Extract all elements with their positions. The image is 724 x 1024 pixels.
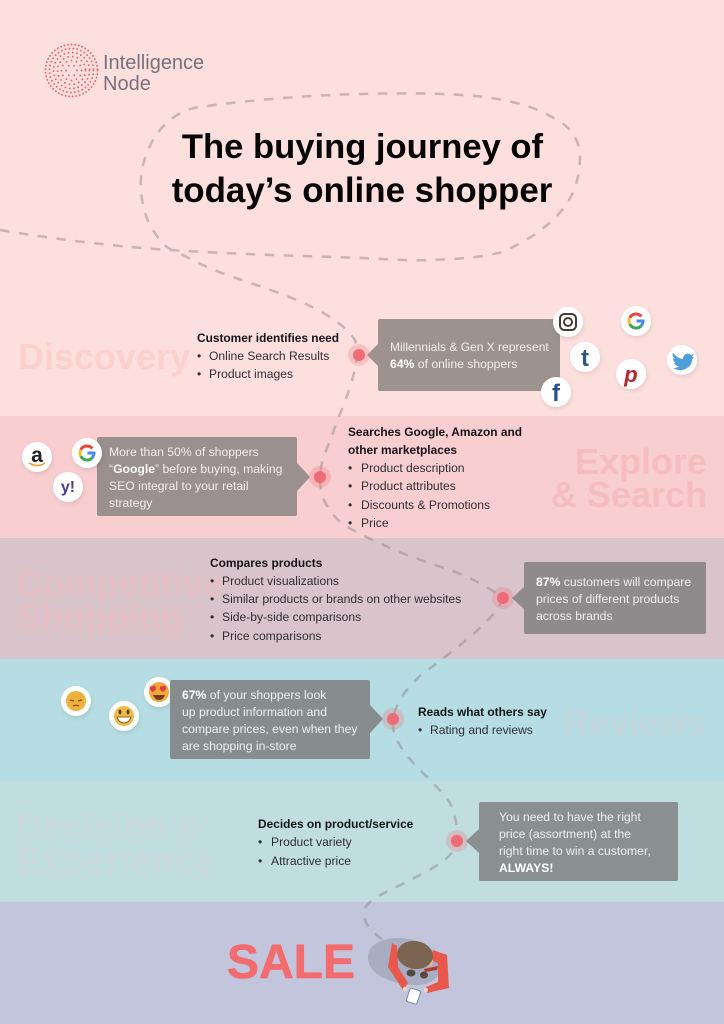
icon: twitter [667, 345, 697, 375]
band: competitive shopping background [0, 538, 724, 659]
journey node: explore [309, 466, 331, 488]
callout: millennials [367, 319, 560, 391]
callout: 67% in-store: are shopping in-store [182, 739, 297, 753]
text block: decides on product: Product variety [271, 835, 353, 849]
callout: 67% in-store: compare prices, even when they [182, 722, 358, 736]
journey node: reviews [382, 708, 404, 730]
callout: 67% in-store: 67% of your shoppers look [182, 688, 327, 702]
logo: Intelligence Node: Intelligence [103, 52, 204, 74]
text block: decides on product: • [258, 835, 262, 849]
icon: google [72, 438, 102, 468]
logo: Intelligence Node: Node [103, 73, 151, 95]
section label: Discovery: Discovery [18, 336, 190, 377]
callout: google search: “Google” before buying, making [109, 462, 282, 476]
callout: millennials: 64% of online shoppers [390, 357, 517, 371]
band: reviews background [0, 659, 724, 781]
icon: amazon: a [31, 444, 43, 467]
icon: pinterest: p [623, 362, 638, 387]
text block: customer identifies need: Customer identifies need [197, 331, 339, 345]
title: The buying journey of [182, 128, 544, 166]
icon: tumblr: t [581, 345, 589, 372]
text block: compares products: • [210, 629, 214, 643]
callout: right price: price (assortment) at the [499, 827, 631, 841]
text block: customer identifies need: • [197, 349, 201, 363]
callout: 87% compare [512, 562, 706, 634]
icon: instagram [553, 307, 583, 337]
text block: decides on product: • [258, 854, 262, 868]
text block: reads what others say [418, 705, 547, 737]
callout: google search: More than 50% of shoppers [109, 445, 259, 459]
callout: google search: strategy [109, 496, 153, 510]
text block: reads what others say: Reads what others say [418, 705, 547, 719]
text block: compares products: • [210, 574, 214, 588]
text block: customer identifies need: Online Search Results [209, 349, 329, 363]
icons: search engines [22, 438, 102, 502]
text block: reads what others say: Rating and reviews [430, 723, 533, 737]
callout: right price: ALWAYS! [499, 861, 553, 875]
text block: customer identifies need: Product images [209, 367, 293, 381]
callout: right price [466, 802, 678, 881]
icon: yahoo: y! [61, 479, 75, 496]
callout: millennials: Millennials & Gen X represent [390, 340, 549, 354]
section label: Reviews: Reviews [563, 702, 707, 743]
text block: compares products: • [210, 592, 214, 606]
text block: searches marketplaces [348, 425, 522, 530]
illustration: shopper from above [368, 938, 449, 1005]
band: sale background [0, 902, 724, 1024]
title [172, 128, 553, 210]
icons: emoji reactions [61, 677, 174, 731]
text block: reads what others say: • [418, 723, 422, 737]
callout: 87% compare: prices of different products [536, 592, 679, 606]
text block: customer identifies need [197, 331, 339, 381]
journey node: decision [446, 830, 468, 852]
text block: searches marketplaces: other marketplaces [348, 443, 457, 457]
journey node: discovery [348, 344, 370, 366]
text block: searches marketplaces: • [348, 461, 352, 475]
callout: 67% in-store [170, 680, 383, 759]
icon: facebook: f [552, 380, 561, 407]
text block: searches marketplaces: • [348, 479, 352, 493]
text block: compares products: Compares products [210, 556, 323, 570]
text block: compares products: Similar products or brands on other websites [222, 592, 461, 606]
text block: compares products: Product visualizations [222, 574, 339, 588]
heading: SALE: SALE [227, 936, 355, 989]
band: decision and experience background [0, 781, 724, 902]
section label: Decision and Experience: Decision & [17, 806, 203, 847]
text block: searches marketplaces: Searches Google, Amazon and [348, 425, 522, 439]
text block: searches marketplaces: Product description [361, 461, 465, 475]
callout: right price: You need to have the right [499, 810, 641, 824]
text block: compares products: Price comparisons [222, 629, 321, 643]
text block: customer identifies need: • [197, 367, 201, 381]
text block: searches marketplaces: • [348, 516, 352, 530]
callout: google search: SEO integral to your retail [109, 479, 249, 493]
icon: google [621, 306, 651, 336]
callout: 67% in-store: up product information and [182, 705, 327, 719]
section label: Competitive Shopping: Shopping [17, 597, 183, 638]
icon: tumblr [570, 342, 600, 372]
section label: Explore and Search: & Search [551, 474, 707, 515]
callout: 87% compare: 87% customers will compare [536, 575, 691, 589]
text block: searches marketplaces: Discounts & Promotions [361, 498, 490, 512]
text block: decides on product: Decides on product/service [258, 817, 414, 831]
text block: searches marketplaces: • [348, 498, 352, 512]
callout: right price: right time to win a customer, [499, 844, 651, 858]
logo: Intelligence Node [46, 44, 204, 96]
text block: searches marketplaces: Product attributes [361, 479, 456, 493]
icon: facebook [541, 377, 571, 407]
icon: smiling emoji [109, 701, 139, 731]
icon: pensive emoji [61, 686, 91, 716]
section label: Competitive Shopping: Competitive [17, 563, 223, 604]
text block: compares products: • [210, 610, 214, 624]
callout: google search [97, 437, 310, 516]
title: today’s online shopper [172, 171, 553, 210]
section label: Explore and Search [551, 441, 707, 515]
text block: decides on product [258, 817, 414, 868]
icon: heart eyes emoji [144, 677, 174, 707]
text block: decides on product: Attractive price [271, 854, 351, 868]
section label: Decision and Experience [17, 806, 216, 881]
icon: pinterest [616, 359, 646, 389]
section label: Explore and Search: Explore [575, 441, 707, 482]
band: explore and search background [0, 416, 724, 538]
icons: social networks [541, 306, 697, 407]
text block: compares products [210, 556, 461, 643]
dashed journey path [0, 93, 580, 942]
callout: 87% compare: across brands [536, 609, 613, 623]
band: discovery background [0, 0, 724, 416]
text block: searches marketplaces: Price [361, 516, 389, 530]
section label: Competitive Shopping [17, 563, 223, 638]
journey node: competitive [492, 587, 514, 609]
text block: compares products: Side-by-side comparisons [222, 610, 361, 624]
section label: Decision and Experience: Experience [17, 840, 216, 881]
